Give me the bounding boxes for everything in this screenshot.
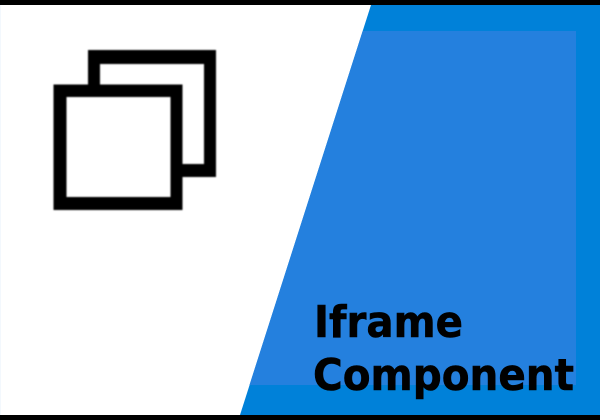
icon: overlapping squares — [54, 50, 216, 210]
title — [313, 297, 574, 401]
bottom black bar — [0, 415, 600, 420]
top black bar — [0, 0, 600, 5]
title: Component — [313, 350, 574, 401]
blue slanted panel — [240, 5, 600, 415]
title: Iframe — [314, 297, 463, 348]
